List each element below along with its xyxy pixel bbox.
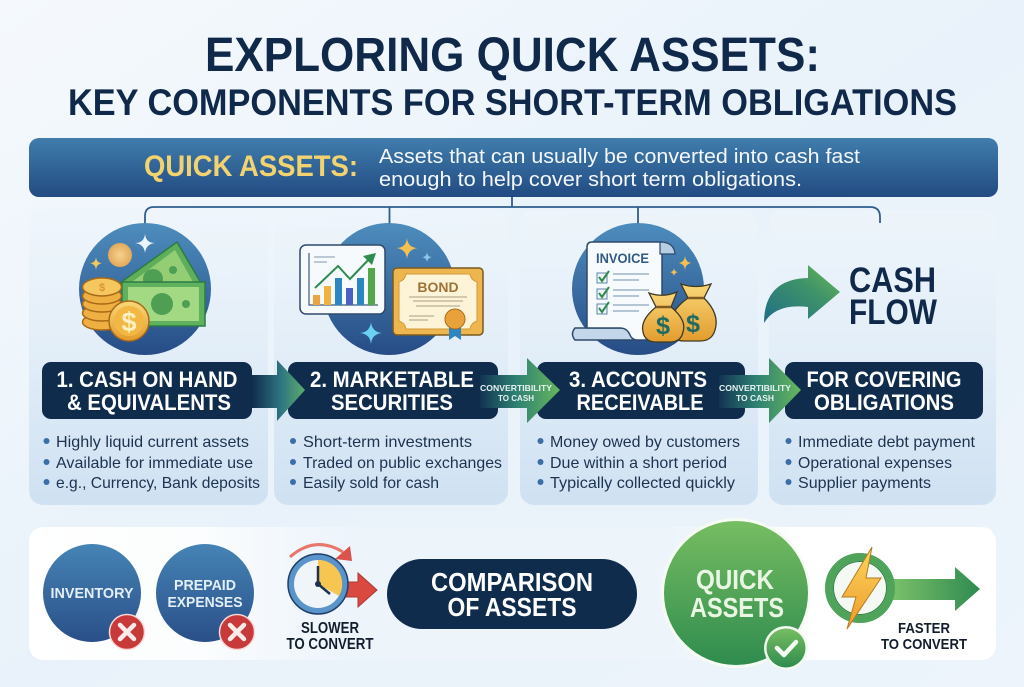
cash flow label: FLOW xyxy=(849,293,937,332)
icon: invoice and money bags: $ xyxy=(656,312,670,340)
banner definition text xyxy=(379,146,860,191)
banner definition text: enough to help cover short term obligations. xyxy=(379,169,802,191)
panel: comparison strip xyxy=(29,527,996,660)
comparison pill: OF ASSETS xyxy=(448,592,576,622)
bullets: column 1: Available for immediate use xyxy=(56,455,253,472)
bullets: column 1: e.g., Currency, Bank deposits xyxy=(56,475,260,492)
panel: column 3 background xyxy=(520,210,758,505)
panel: column 1 background xyxy=(29,210,268,505)
bullets: column 1: Highly liquid current assets xyxy=(56,434,249,451)
bond certificate: BOND xyxy=(417,279,459,295)
arrow: convertibility to cash 1 xyxy=(480,358,560,423)
quick assets circle: QUICK xyxy=(696,564,774,595)
comparison pill: COMPARISON xyxy=(431,567,593,597)
prepaid expenses circle: PREPAID xyxy=(174,577,236,594)
title: EXPLORING QUICK ASSETS: xyxy=(205,29,820,82)
cash flow label xyxy=(849,261,937,332)
comparison pill xyxy=(387,559,637,629)
icon: slow clock xyxy=(288,545,377,614)
heading box: accounts receivable xyxy=(537,362,745,419)
prepaid expenses circle: EXPENSES xyxy=(168,594,242,611)
bullets: column 3 xyxy=(538,434,740,492)
definition banner xyxy=(29,138,998,197)
icon: invoice and money bags xyxy=(572,223,716,355)
quick assets circle xyxy=(661,518,811,670)
bullets: column 1 xyxy=(44,434,260,492)
cash flow label: CASH xyxy=(849,261,936,300)
heading box: covering obligations xyxy=(785,362,983,419)
heading box: covering obligations: FOR COVERING xyxy=(806,367,962,392)
heading box: covering obligations: OBLIGATIONS xyxy=(814,390,954,415)
bullets: column 4: Supplier payments xyxy=(798,475,931,492)
icon: red x xyxy=(220,614,254,650)
slower to convert label: SLOWER xyxy=(301,620,359,637)
heading box: cash on hand xyxy=(42,362,252,419)
arrow: cash to securities xyxy=(252,360,305,421)
faster to convert label: FASTER xyxy=(898,620,950,637)
arrow: convertibility to cash 1: TO CASH xyxy=(498,393,534,403)
arrow: convertibility to cash 2: CONVERTIBILITY xyxy=(719,383,791,393)
bullets: column 4: Immediate debt payment xyxy=(798,434,976,451)
heading box: marketable securities xyxy=(288,362,498,419)
bullets: column 3: Due within a short period xyxy=(550,455,727,472)
title: KEY COMPONENTS FOR SHORT-TERM OBLIGATIONS xyxy=(68,82,957,123)
bullets: column 2: Traded on public exchanges xyxy=(303,455,502,472)
bullets: column 4: Operational expenses xyxy=(798,455,952,472)
icon: cash and coins: $ xyxy=(99,282,105,294)
heading box: accounts receivable: 3. ACCOUNTS xyxy=(569,367,707,392)
prepaid expenses circle xyxy=(156,544,254,650)
arrow: convertibility to cash 1: CONVERTIBILITY xyxy=(480,383,552,393)
heading box: cash on hand: & EQUIVALENTS xyxy=(67,390,231,415)
bullets: column 4 xyxy=(786,434,976,492)
bar chart card xyxy=(300,245,385,314)
quick assets circle: ASSETS xyxy=(690,592,784,623)
banner definition text: Assets that can usually be converted into cash fast xyxy=(379,146,860,168)
faster to convert label xyxy=(881,620,967,653)
icon: green check xyxy=(764,626,808,670)
panel: column 4 background xyxy=(769,210,996,505)
heading box: cash on hand: 1. CASH ON HAND xyxy=(56,367,238,392)
slower to convert label xyxy=(286,620,374,653)
bullets: column 2 xyxy=(290,434,502,492)
icon: chart and bond xyxy=(300,223,483,355)
icon: cash flow curved arrow xyxy=(764,265,840,323)
icon: invoice and money bags: INVOICE xyxy=(596,250,649,266)
icon: red x xyxy=(110,614,144,650)
heading box: marketable securities: 2. MARKETABLE xyxy=(310,367,474,392)
bullets: column 2: Easily sold for cash xyxy=(303,475,439,492)
arrow: convertibility to cash 2 xyxy=(719,358,801,423)
bond certificate xyxy=(393,268,483,340)
icon: cash and coins: $ xyxy=(121,307,137,337)
bullets: column 2: Short-term investments xyxy=(303,434,472,451)
faster to convert label: TO CONVERT xyxy=(881,636,967,653)
title xyxy=(68,29,957,123)
inventory circle xyxy=(43,544,144,650)
bracket connector xyxy=(145,197,880,224)
heading box: marketable securities: SECURITIES xyxy=(331,390,453,415)
icon: cash and coins xyxy=(79,223,211,355)
icon: invoice and money bags: $ xyxy=(686,310,700,338)
banner label: QUICK ASSETS: xyxy=(144,150,358,183)
bullets: column 3: Money owed by customers xyxy=(550,434,740,451)
heading box: accounts receivable: RECEIVABLE xyxy=(576,390,704,415)
panel: column 2 background xyxy=(274,210,508,505)
slower to convert label: TO CONVERT xyxy=(286,636,374,653)
arrow: convertibility to cash 2: TO CASH xyxy=(736,393,774,403)
bullets: column 3: Typically collected quickly xyxy=(550,475,735,492)
icon: fast lightning arrow xyxy=(829,547,980,629)
inventory circle: INVENTORY xyxy=(50,585,134,602)
